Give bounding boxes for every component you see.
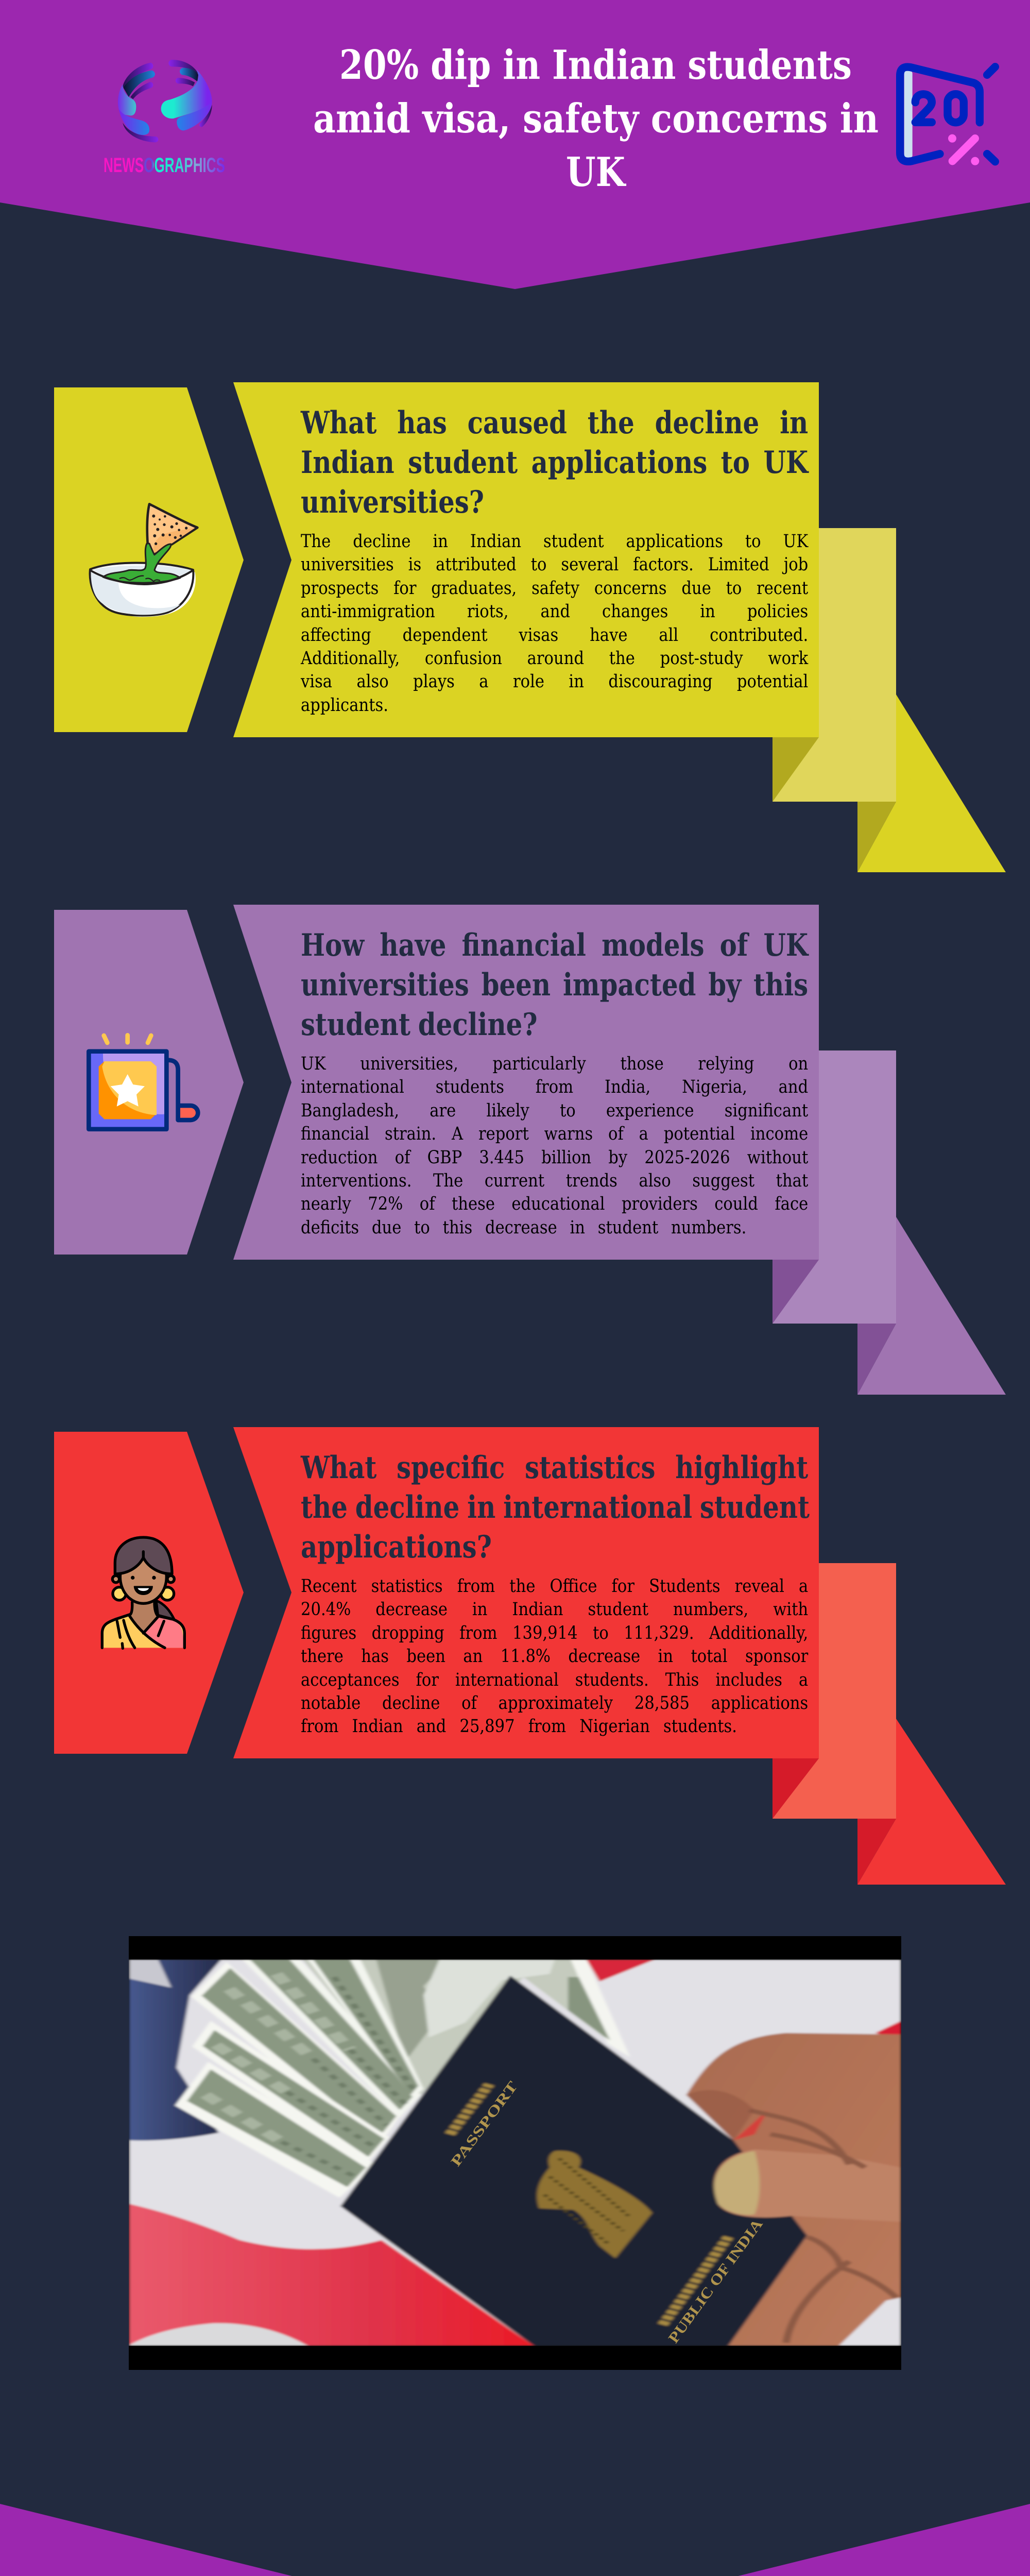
body text: causes: The decline in Indian student applications to UK: [301, 531, 808, 552]
body text: causes: prospects for graduates, safety concerns due to recent: [301, 578, 808, 599]
heading: statistics: the decline in international student: [301, 1489, 810, 1526]
body text: financial: international students from India, Nigeria, and: [301, 1077, 808, 1097]
content banner: financial: [233, 905, 819, 1260]
footer banner: [0, 2504, 1030, 2576]
panel: causes of decline: [54, 382, 1006, 872]
panel: statistics: [54, 1427, 1006, 1885]
body text: causes: anti-immigration riots, and changes in policies: [301, 601, 808, 622]
body text: statistics: 20.4% decrease in Indian student numbers, with: [301, 1599, 808, 1620]
body text: statistics: there has been an 11.8% decrease in total sponsor: [301, 1646, 808, 1667]
heading: financial: universities been impacted by this: [301, 967, 808, 1003]
body text: statistics: notable decline of approximately 28,585 applications: [301, 1693, 808, 1714]
body text: statistics: acceptances for international students. This includes a: [301, 1670, 808, 1690]
header banner: [0, 0, 1030, 289]
icon: woman in sari: [102, 1537, 184, 1648]
arrow tab: causes: [54, 387, 244, 732]
body text: financial: nearly 72% of these educational providers could face: [301, 1194, 808, 1214]
content banner: causes: [233, 382, 819, 737]
panel: financial models: [54, 905, 1006, 1395]
body text: causes: affecting dependent visas have all contributed.: [301, 625, 808, 646]
body text: causes: Additionally, confusion around the post-study work: [301, 648, 808, 669]
body text: statistics: from Indian and 25,897 from Nigerian students.: [301, 1716, 737, 1737]
body text: statistics: Recent statistics from the Office for Students reveal a: [301, 1576, 808, 1597]
body text: statistics: figures dropping from 139,914 to 111,329. Additionally,: [301, 1623, 808, 1643]
body text: financial: financial strain. A report warns of a potential income: [301, 1124, 808, 1144]
ribbon: financial: [772, 1050, 1006, 1395]
ribbon: statistics: [772, 1563, 1006, 1885]
heading: causes: [301, 405, 809, 520]
title: UK: [566, 149, 627, 196]
body text: financial: interventions. The current trends also suggest that: [301, 1171, 808, 1191]
body text: causes: visa also plays a role in discouraging potential: [301, 671, 808, 692]
icon: chip and dip bowl: [90, 504, 197, 617]
arrow tab: financial: [54, 910, 244, 1255]
body text: causes: applicants.: [301, 695, 388, 716]
body text: statistics: [301, 1576, 809, 1737]
ribbon: causes: [772, 528, 1006, 872]
heading: causes: What has caused the decline in: [301, 405, 808, 441]
body text: causes: [301, 531, 809, 716]
heading: financial: How have financial models of UK: [301, 927, 808, 963]
body text: causes: universities is attributed to several factors. Limited job: [301, 554, 808, 575]
heading: statistics: applications?: [301, 1529, 492, 1565]
body text: financial: reduction of GBP 3.445 billion by 2025-2026 without: [301, 1147, 808, 1168]
heading: causes: universities?: [301, 484, 484, 520]
logo: Newsographics header: [104, 60, 225, 175]
icon: star mug: [89, 1035, 198, 1129]
passport lettering: [448, 2078, 766, 2346]
heading: causes: Indian student applications to UK: [301, 445, 808, 481]
heading: financial: student decline?: [301, 1007, 538, 1043]
body text: financial: Bangladesh, are likely to experience significant: [301, 1100, 808, 1121]
heading: statistics: [301, 1450, 810, 1565]
icon: 20 percent door: [896, 63, 999, 166]
passport lettering: PASSPORT: [448, 2078, 521, 2170]
heading: financial: [301, 927, 809, 1043]
arrow tab: statistics: [54, 1432, 244, 1754]
passport lettering: PUBLIC OF INDIA: [665, 2216, 766, 2346]
body text: financial: deficits due to this decrease in student numbers.: [301, 1217, 746, 1238]
content banner: statistics: [233, 1427, 819, 1758]
heading: statistics: What specific statistics highlight: [301, 1450, 808, 1486]
body text: financial: UK universities, particularly those relying on: [301, 1054, 808, 1074]
body text: financial: [301, 1054, 808, 1238]
photo: Indian passport with dollar bills: [129, 1936, 901, 2370]
title: [313, 42, 879, 196]
